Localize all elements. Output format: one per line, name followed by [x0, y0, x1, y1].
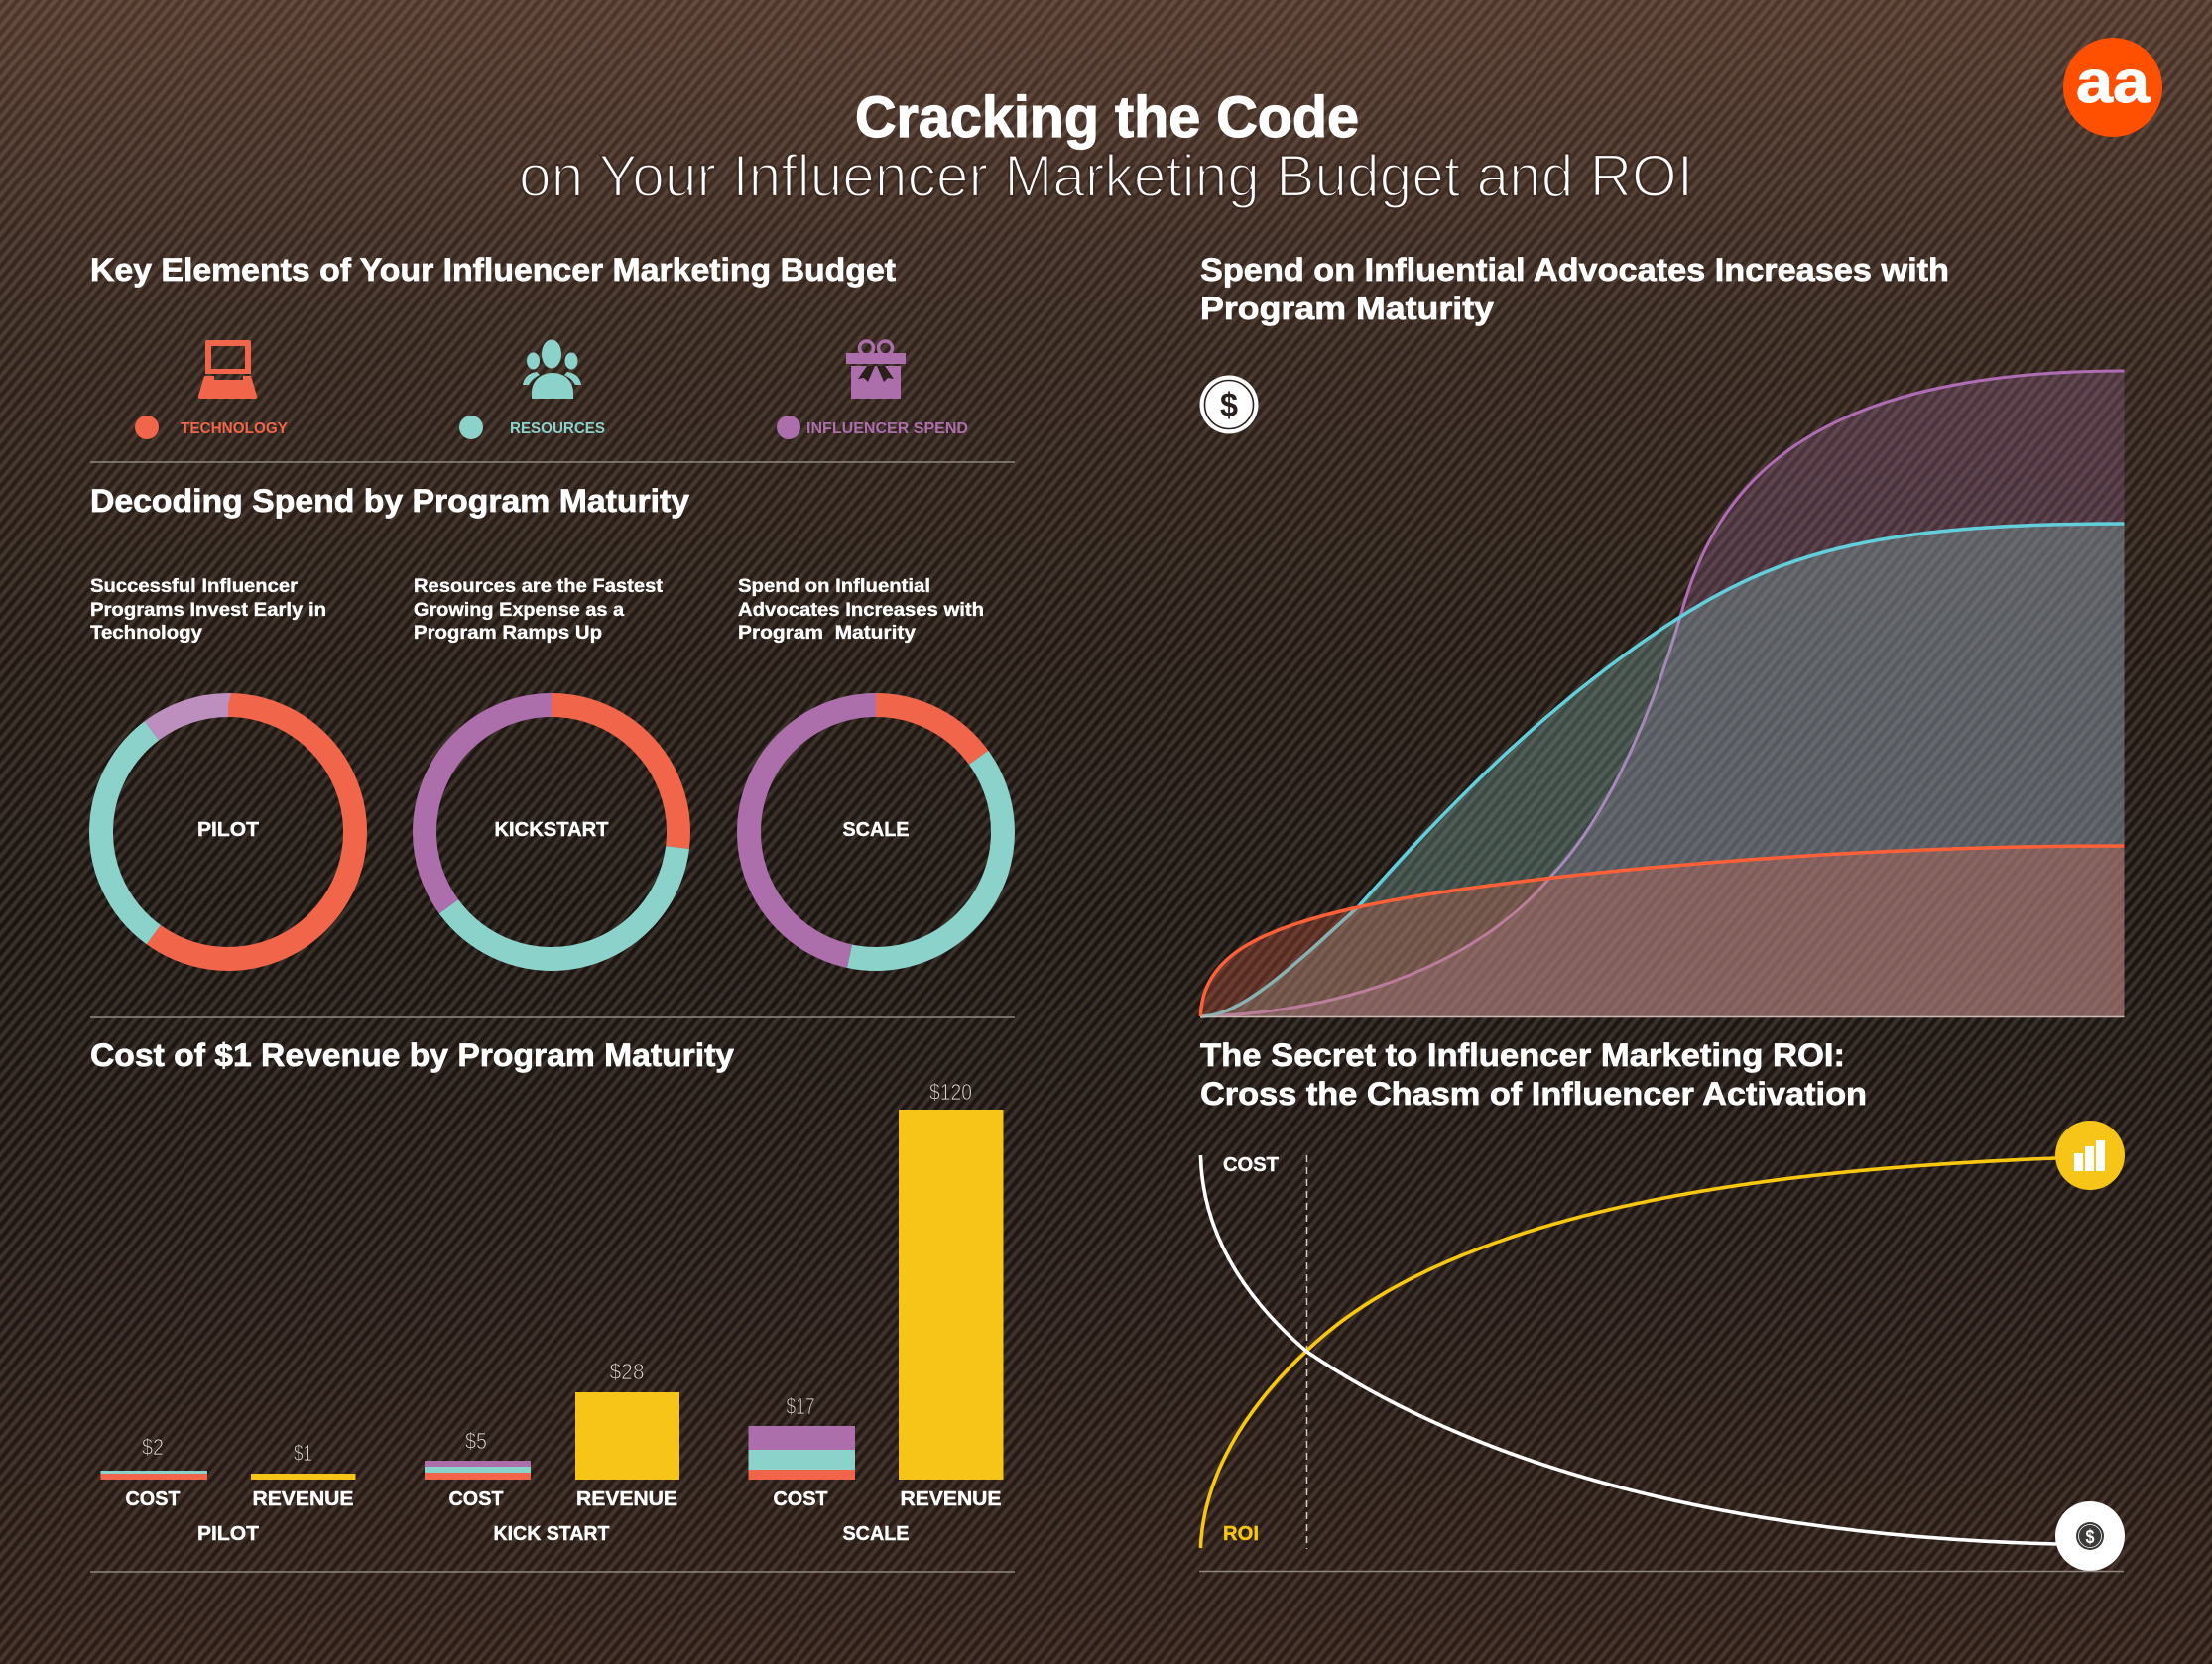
icon: dollar badge — [1200, 375, 1258, 434]
text block: scale — [738, 576, 984, 644]
pilot cost bar: COST — [125, 1488, 181, 1510]
title — [519, 85, 1693, 209]
curve: cost — [1200, 1155, 2056, 1544]
heading: secret to ROI: The Secret to Influencer Marketing ROI: — [1200, 1037, 1845, 1073]
group labels: PILOT — [197, 1523, 259, 1545]
area: technology — [1200, 846, 2125, 1017]
donut chart: scale — [749, 705, 1003, 959]
area chart — [1200, 371, 2125, 1017]
line chart — [1200, 1121, 2125, 1571]
icon: gift — [846, 341, 906, 399]
legend: technology: TECHNOLOGY — [181, 420, 289, 437]
donut chart: pilot: PILOT — [197, 819, 259, 841]
text block: scale: Advocates Increases with — [738, 600, 984, 621]
icon: dollar badge white — [2055, 1501, 2125, 1571]
scale cost bar: COST — [774, 1488, 827, 1510]
donut chart: kickstart — [425, 705, 678, 959]
group labels: SCALE — [843, 1523, 909, 1545]
heading: cost of revenue: Cost of $1 Revenue by Program Maturity — [90, 1037, 734, 1073]
panel: cost of $1 revenue — [90, 1037, 1004, 1545]
kickstart cost bar: COST — [448, 1488, 504, 1510]
text block: pilot — [90, 576, 326, 644]
legend: influencer spend — [777, 416, 968, 439]
legend: technology — [135, 416, 289, 439]
kickstart cost bar — [425, 1428, 531, 1510]
heading: spend on advocates: Program Maturity — [1200, 291, 1494, 326]
icon: laptop — [198, 340, 257, 399]
heading: decoding spend: Decoding Spend by Program Maturity — [90, 483, 689, 519]
subtitle: on Your Influencer Marketing Budget and ROI — [519, 143, 1693, 209]
icon: dollar badge: $ — [1220, 387, 1238, 424]
kickstart revenue bar: $28 — [609, 1359, 645, 1384]
text block: pilot: Successful Influencer — [90, 576, 299, 597]
donut chart: pilot — [101, 705, 355, 959]
heading: spend on advocates: Spend on Influential Advocates Increases with — [1200, 252, 1949, 288]
label: cost: COST — [1223, 1154, 1279, 1176]
pilot cost bar: $2 — [142, 1434, 164, 1460]
heading: key elements: Key Elements of Your Influencer Marketing Budget — [90, 252, 896, 288]
area: influencer spend — [1200, 371, 2125, 1017]
text block: scale: Program Maturity — [738, 623, 916, 644]
icon: logo: aa — [2076, 49, 2151, 115]
scale revenue bar — [899, 1079, 1004, 1510]
icon: logo — [2063, 38, 2162, 137]
dashed chasm marker — [1305, 1155, 1307, 1549]
text block: kickstart — [414, 576, 664, 644]
group labels — [197, 1523, 909, 1545]
icon: bar chart badge — [2055, 1121, 2125, 1190]
legend: influencer spend: INFLUENCER SPEND — [806, 420, 968, 437]
icon: dollar badge white: $ — [2085, 1527, 2095, 1548]
panel: decoding spend — [90, 483, 1003, 959]
panel: key elements — [90, 252, 968, 439]
scale revenue bar: REVENUE — [901, 1488, 1002, 1510]
curve: ROI — [1200, 1158, 2056, 1548]
scale cost bar: $17 — [786, 1393, 815, 1419]
text block: pilot: Technology — [90, 623, 202, 644]
kickstart revenue bar — [575, 1359, 679, 1510]
panel: spend on influential advocates — [1200, 252, 2125, 1017]
text block: scale: Spend on Influential — [738, 576, 930, 597]
text block: kickstart: Resources are the Fastest — [414, 576, 664, 597]
icon: people — [523, 339, 581, 399]
text block: kickstart: Program Ramps Up — [414, 623, 602, 644]
title line: Cracking the Code: Cracking the Code — [855, 85, 1359, 150]
scale revenue bar: $120 — [929, 1079, 972, 1105]
pilot revenue bar: $1 — [294, 1440, 312, 1466]
donut chart: scale: SCALE — [843, 819, 909, 841]
group labels: KICK START — [494, 1523, 609, 1545]
kickstart revenue bar: REVENUE — [576, 1488, 677, 1510]
heading: spend on advocates — [1200, 252, 1949, 326]
legend: resources — [459, 416, 605, 439]
bar chart — [101, 1079, 1004, 1545]
label: ROI: ROI — [1223, 1523, 1259, 1545]
text block: pilot: Programs Invest Early in — [90, 600, 326, 621]
text block: kickstart: Growing Expense as a — [414, 600, 624, 621]
area: resources — [1200, 524, 2125, 1017]
pilot cost bar — [101, 1434, 207, 1510]
heading: secret to ROI — [1200, 1037, 1867, 1112]
scale cost bar — [748, 1393, 855, 1510]
pilot revenue bar: REVENUE — [252, 1488, 353, 1510]
heading: secret to ROI: Cross the Chasm of Influencer Activation — [1200, 1076, 1867, 1112]
panel: secret to ROI — [1200, 1037, 2125, 1571]
legend: resources: RESOURCES — [510, 420, 605, 437]
kickstart cost bar: $5 — [465, 1428, 487, 1454]
donut chart: kickstart: KICKSTART — [494, 819, 609, 841]
pilot revenue bar — [251, 1440, 355, 1510]
